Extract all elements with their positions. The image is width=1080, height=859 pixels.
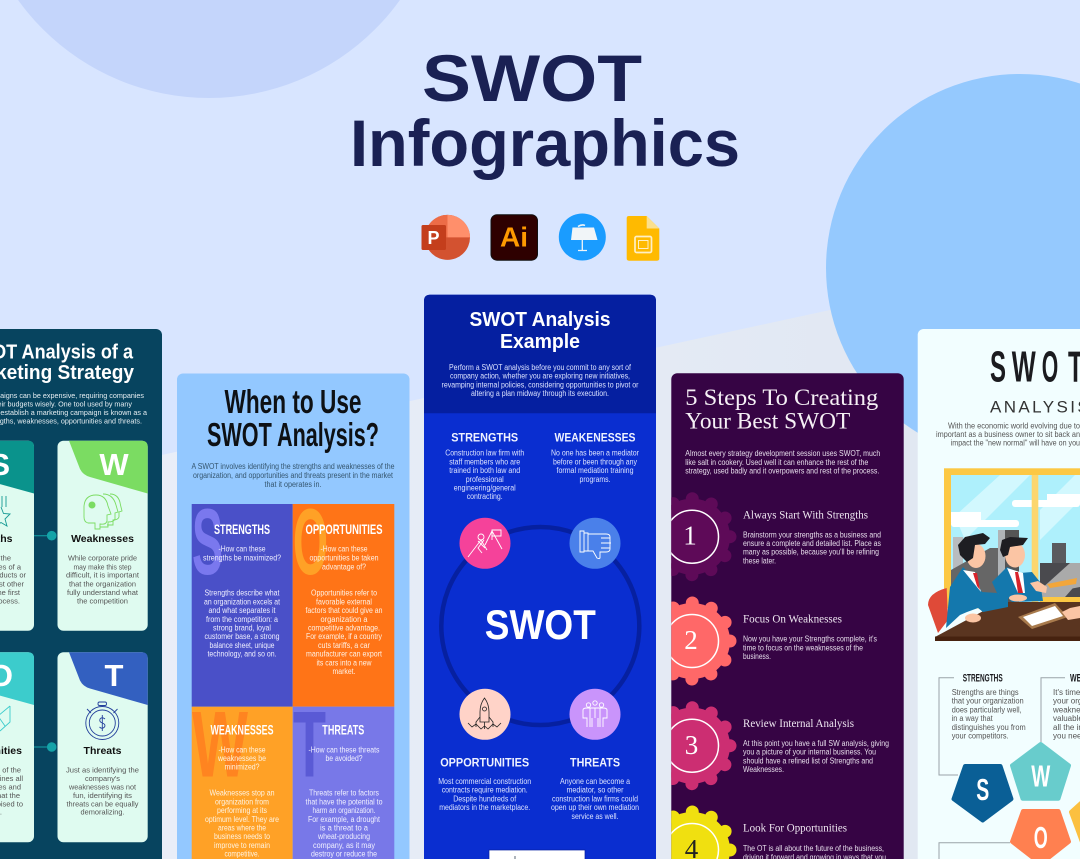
quadrant: strengths: STRENGTHS: [214, 521, 270, 537]
quadrant: opportunities: For example, if a country: [306, 632, 382, 641]
card: weaknesses: that the organization: [69, 579, 136, 588]
card: weaknesses: [58, 441, 148, 631]
white box: [489, 850, 585, 859]
weakenesses text: programs.: [580, 475, 610, 484]
step 4 text: The OT is all about the future of the business,: [743, 844, 884, 853]
gear step 3: [654, 708, 730, 784]
quadrant: opportunities: factors that could give an: [306, 606, 382, 615]
quadrant: opportunities: O: [293, 489, 328, 594]
opportunities text: mediators in the marketplace.: [439, 803, 530, 812]
panel: 5 steps: [654, 373, 904, 859]
quadrant: weaknesses: performing at its: [217, 806, 267, 815]
icon: stopwatch: [86, 702, 119, 740]
illustration: meeting: [928, 468, 1080, 641]
strengths block: does particularly well,: [952, 705, 1022, 714]
intro text: revamping internal policies, considering opportunities to pivot or: [442, 380, 639, 390]
card: weaknesses: While corporate pride: [68, 554, 137, 563]
icon: Illustrator: Ai: [500, 222, 528, 252]
strengths text: staff members who are: [449, 457, 521, 466]
background circle right: [826, 74, 1080, 462]
icon: heads: [84, 494, 122, 529]
quadrant: opportunities: organization a: [320, 615, 368, 624]
opportunities text: contracts require mediation.: [442, 786, 528, 795]
icon: PowerPoint: [422, 215, 470, 260]
quadrant: threats: harm an organization.: [312, 806, 376, 815]
card: weaknesses: W: [99, 447, 129, 482]
intro text: A SWOT involves identifying the strengths and weaknesses of the: [192, 462, 395, 471]
title: Infographics: [350, 106, 740, 180]
intro text: organization, and opportunities and threats present in the market: [193, 471, 394, 480]
quadrant: threats: [293, 692, 394, 859]
title: SWOT: [422, 41, 642, 115]
quadrant: weaknesses: weaknesses be: [217, 754, 266, 763]
card: threats: fun, identifying its: [73, 791, 132, 800]
quadrant: opportunities: market.: [332, 667, 356, 676]
icon: Keynote: [559, 214, 606, 260]
pentagon W: [1012, 744, 1069, 799]
intro text: [192, 462, 395, 489]
card: threats: company's: [85, 774, 120, 783]
heading: SWOT Analysis?: [207, 416, 379, 453]
quadrant: weaknesses: Weaknesses stop an: [210, 789, 274, 798]
quadrant: threats: Threats refer to factors: [309, 789, 379, 798]
icon: Illustrator: [491, 215, 538, 260]
gear step 1: [654, 499, 730, 575]
quadrant: opportunities: -How can these: [320, 545, 368, 554]
card: threats: Threats: [84, 745, 122, 757]
quadrant: opportunities: its cars into a new: [316, 658, 372, 667]
central ring: [441, 527, 639, 725]
strengths text: STRENGTHS: [451, 431, 518, 445]
quadrant: opportunities: favorable external: [316, 597, 372, 606]
quadrant: strengths: [192, 489, 293, 707]
quadrant: threats: wheat-producing: [317, 832, 370, 841]
step 3 text: [743, 718, 889, 774]
step 2 text: Focus On Weaknesses: [743, 614, 842, 626]
pentagon W: W: [1031, 759, 1051, 794]
quadrant: threats: company, as it may: [313, 841, 375, 850]
intro text: that it operates in.: [264, 480, 322, 489]
intro text: strategy, used badly and it overpowers and rest of the process.: [685, 467, 879, 476]
quadrant: weaknesses: improve to remain: [214, 841, 270, 850]
heading: [207, 383, 379, 453]
icon: Google Slides: [627, 216, 659, 261]
threats text: mediator, so other: [566, 786, 624, 795]
heading: S: [990, 343, 1006, 392]
opportunities text: [438, 756, 531, 812]
quadrant: opportunities: opportunities be taken: [310, 554, 378, 562]
card: threats: Just as identifying the: [66, 765, 139, 774]
quadrant: strengths: -How can these: [218, 545, 266, 554]
quadrant: weaknesses: [192, 692, 293, 859]
quadrant: strengths: strong brand, loyal: [213, 624, 271, 632]
quadrant: opportunities: manufacturer can export: [306, 650, 383, 659]
quadrant: weaknesses: W: [192, 692, 248, 797]
icon: team: [570, 689, 620, 740]
card: threats: [58, 652, 148, 842]
card: threats: weaknesses was not: [68, 782, 137, 791]
weakenesses text: No one has been a mediator: [551, 449, 639, 458]
background lower band: [0, 258, 1080, 859]
pentagon O: [1012, 811, 1069, 859]
man right: [992, 537, 1043, 602]
quadrant: strengths: customer base, a strong: [204, 632, 280, 641]
quadrant: threats: -How can these threats: [308, 745, 380, 754]
threats text: open up their own mediation: [551, 803, 639, 812]
background circle top: [0, 0, 444, 98]
card: threats: threats can be equally: [66, 799, 139, 808]
threats text: construction law firms could: [552, 794, 638, 804]
opportunities text: Despite hundreds of: [453, 794, 517, 804]
strengths text: professional: [466, 475, 504, 484]
step 3 text: Review Internal Analysis: [743, 718, 854, 730]
quadrant: strengths: Strengths describe what: [204, 589, 280, 598]
heading: Your Best SWOT: [685, 408, 850, 433]
gear step 1: 1: [683, 520, 697, 550]
heading: Example: [500, 331, 580, 353]
card: weaknesses: difficult, it is important: [66, 571, 140, 580]
window: [944, 468, 1080, 608]
card: weaknesses: the competition: [77, 596, 128, 605]
gear step 2: 2: [684, 625, 698, 655]
strengths text: engineering/general: [454, 484, 516, 492]
strengths block: [939, 673, 1026, 775]
opportunities text: OPPORTUNITIES: [440, 756, 529, 770]
strengths text: Construction law firm with: [445, 449, 524, 458]
intro text: [936, 421, 1080, 448]
card: threats: demoralizing.: [80, 808, 124, 817]
strengths block: that your organization: [952, 697, 1024, 706]
step 3 text: you a picture of your internal business. You: [743, 748, 876, 757]
step 2 text: business.: [743, 652, 771, 661]
connectors: [34, 531, 56, 751]
step 4 text: Look For Opportunities: [743, 823, 847, 835]
lower bracket: [939, 843, 1010, 859]
card: weaknesses: may make this step: [74, 562, 132, 571]
central SWOT label: SWOT: [485, 601, 596, 648]
heading: [990, 343, 1080, 392]
title: [350, 41, 740, 180]
icon: envelope: [0, 706, 10, 731]
card: threats: T: [105, 658, 124, 693]
quadrant: weaknesses: business needs to: [214, 832, 270, 841]
weakenesses text: formal mediation training: [556, 466, 634, 475]
quadrant: strengths: S: [192, 489, 223, 594]
folder and sleeve: [1047, 577, 1080, 593]
strengths block: Strengths are things: [952, 688, 1019, 697]
quadrant: opportunities: [293, 489, 394, 707]
strengths text: trained in both law and: [449, 466, 520, 475]
step 2 text: [743, 614, 877, 661]
quadrant: strengths: and what separates it: [208, 606, 276, 615]
quadrant: strengths: an organization excels at: [204, 597, 281, 606]
quadrant: weaknesses: optimum level. They are: [205, 815, 279, 824]
icon: PowerPoint: P: [427, 228, 440, 248]
quadrant: opportunities: OPPORTUNITIES: [306, 521, 382, 537]
quadrant: weaknesses: competitive.: [224, 850, 260, 859]
hands: [965, 581, 1080, 622]
weakenesses text: WEAKENESSES: [554, 431, 636, 445]
quadrant: strengths: balance sheet, unique: [210, 641, 275, 650]
intro text: like salt in cookery. Used well it can enhance the rest of the: [685, 458, 869, 467]
header band: [424, 295, 656, 413]
quadrant: weaknesses: organization from: [215, 797, 269, 806]
step 1 text: Brainstorm your strengths as a business and: [743, 530, 881, 539]
intro text: Perform a SWOT analysis before you commit to any sort of: [449, 363, 632, 372]
panel: SWOT analysis white: [918, 329, 1080, 859]
pentagon S: S: [976, 772, 989, 807]
quadrant: opportunities: advantage of?: [322, 562, 366, 571]
software icons: [422, 214, 659, 261]
quadrant: opportunities: Opportunities refer to: [311, 589, 377, 598]
quadrant: threats: is a threat to a: [320, 824, 369, 832]
threats text: [551, 756, 639, 821]
weaknesses block: [1041, 673, 1080, 742]
intro text: [685, 449, 880, 476]
quadrant: threats: THREATS: [322, 721, 364, 737]
quadrant: threats: T: [293, 692, 326, 797]
quadrant: threats: destroy or reduce the: [311, 850, 377, 859]
gear step 3: 3: [685, 730, 698, 760]
table: [935, 602, 1080, 641]
strengths text: contracting.: [467, 492, 503, 501]
step 1 text: many as possible, because you'll be refining: [743, 548, 879, 557]
step 2 text: time to focus on the weaknesses of the: [743, 644, 863, 652]
heading: W: [1012, 343, 1036, 392]
gear step 4: [654, 812, 730, 859]
step 4 text: [743, 823, 886, 859]
quadrant: strengths: strengths be maximized?: [203, 554, 281, 562]
heading: When to Use: [224, 383, 362, 420]
step 1 text: Always Start With Strengths: [743, 509, 868, 521]
weakenesses text: before or been through any: [553, 457, 637, 466]
quadrant: opportunities: competitive advantage.: [308, 624, 380, 632]
card: weaknesses: fully understand what: [67, 588, 139, 597]
quadrant: threats: that have the potential to: [306, 797, 383, 806]
quadrant: strengths: technology, and so on.: [208, 650, 276, 659]
heading: [470, 309, 610, 353]
intro text: altering a plan midway through its execution.: [471, 389, 609, 398]
pentagon S: [954, 766, 1012, 820]
strengths block: STRENGTHS: [963, 673, 1003, 685]
card: weaknesses: Weaknesses: [71, 533, 134, 545]
panel: SWOT analysis example: [424, 295, 656, 859]
strengths text: [445, 431, 524, 501]
icon: thumbs down: [570, 518, 620, 569]
quadrant: weaknesses: -How can these: [218, 745, 266, 754]
panel: marketing strategy: [0, 329, 162, 859]
intro text: [0, 391, 147, 426]
threats text: Anyone can become a: [560, 777, 630, 786]
quadrant: weaknesses: minimized?: [224, 763, 260, 772]
step 1 text: ensure a complete and detailed list. Place as: [743, 539, 881, 548]
panel: when to use: [177, 374, 410, 859]
strengths block: your competitors.: [952, 731, 1009, 740]
step 3 text: Weaknesses.: [743, 765, 784, 774]
quadrant: weaknesses: WEAKNESSES: [210, 721, 274, 737]
quadrant: threats: be avoided?: [326, 754, 363, 763]
opportunities text: Most commercial construction: [438, 777, 531, 786]
chair: [928, 588, 948, 633]
quadrant: opportunities: cuts tariffs, a car: [318, 641, 370, 650]
pentagon O: O: [1034, 820, 1048, 855]
icon: star: [0, 496, 10, 526]
quadrant: threats: For example, a drought: [308, 815, 381, 824]
card: strengths: [0, 441, 34, 631]
heading: SWOT Analysis: [470, 309, 610, 331]
card: opportunities: [0, 652, 34, 842]
step 2 text: Now you have your Strengths complete, it's: [743, 635, 877, 644]
weakenesses text: [551, 431, 639, 484]
heading: 5 Steps To Creating: [685, 385, 879, 410]
icon: climber: [460, 518, 510, 569]
pentagon T: [1071, 802, 1080, 842]
step 1 text: these later.: [743, 557, 776, 566]
step 1 text: [743, 509, 881, 566]
threats text: service as well.: [572, 812, 618, 821]
icon: rocket: [460, 689, 510, 740]
heading: O: [1042, 343, 1058, 392]
heading: [685, 385, 879, 433]
quadrant: strengths: from the competition: a: [206, 615, 278, 624]
strengths block: distinguishes you from: [952, 723, 1026, 732]
step 3 text: At this point you have a full SW analysis, giving: [743, 739, 889, 748]
man left: [946, 533, 1008, 628]
threats text: THREATS: [570, 756, 620, 770]
intro text: Almost every strategy development session uses SWOT, much: [685, 449, 880, 458]
step 3 text: should have a refined list of Strengths and: [743, 756, 873, 766]
quadrant: weaknesses: areas where the: [218, 824, 266, 832]
intro text: [442, 363, 639, 398]
strengths block: in a way that: [952, 714, 993, 723]
heading: [0, 342, 135, 384]
intro text: company action, whether you are exploring new initiatives,: [450, 372, 630, 381]
gear step 2: [654, 603, 730, 679]
